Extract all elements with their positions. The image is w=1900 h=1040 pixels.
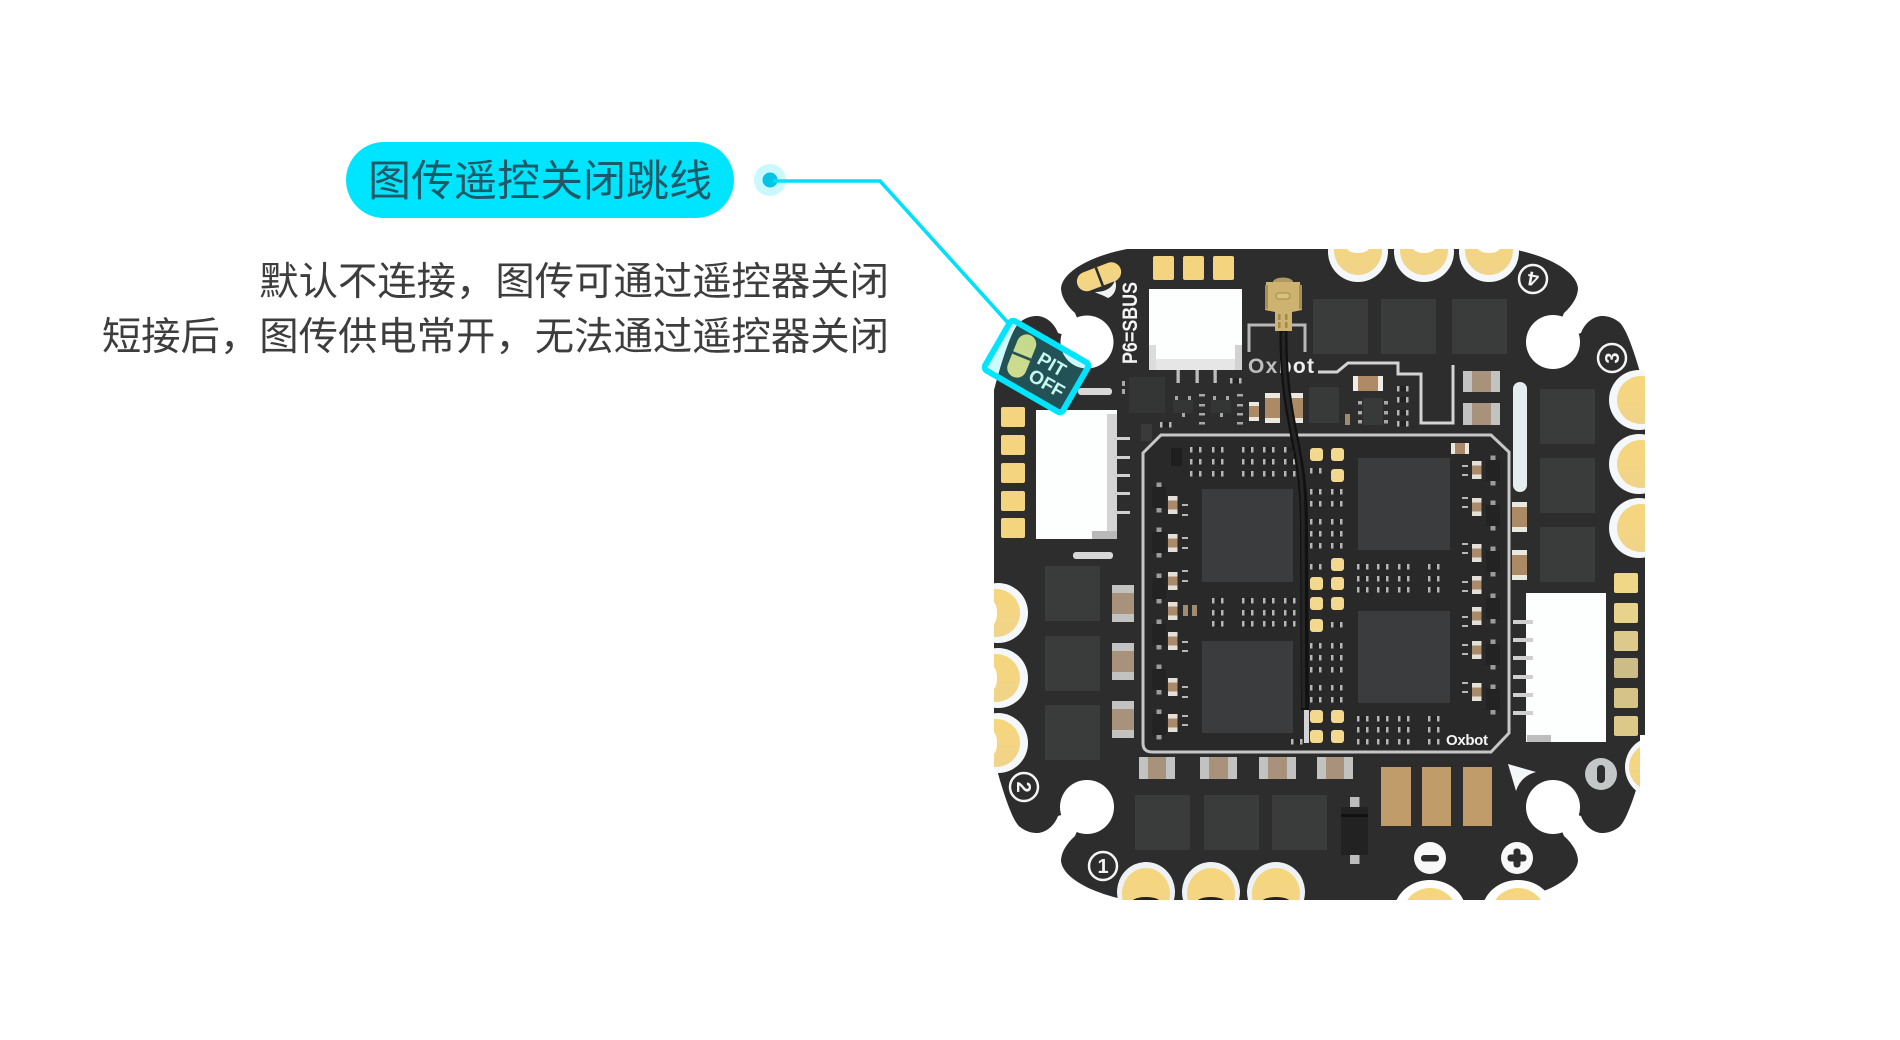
antenna bracket bbox=[1249, 325, 1305, 352]
flight controller board bbox=[994, 249, 1645, 900]
jumper label: OFF bbox=[1025, 366, 1068, 403]
motor label 1: 1 bbox=[1097, 856, 1109, 878]
solder pads rectangular bbox=[1001, 256, 1638, 736]
diode bbox=[1341, 797, 1368, 864]
right connector bbox=[1513, 593, 1606, 742]
shield logo Oxbot: Oxbot bbox=[1446, 732, 1488, 749]
solder pads round bbox=[994, 249, 1645, 900]
power MOSFETs bbox=[1045, 299, 1595, 850]
description text: 默认不连接，图传可通过遥控器关闭 bbox=[259, 260, 889, 304]
motor label 3 bbox=[1598, 344, 1626, 372]
right driver parts bbox=[1451, 443, 1500, 714]
title pill: 图传遥控关闭跳线 bbox=[368, 158, 712, 206]
small top components bbox=[1122, 377, 1408, 441]
left driver parts bbox=[1152, 482, 1197, 740]
motor label 1 bbox=[1089, 852, 1117, 880]
description text bbox=[102, 260, 889, 358]
large chips bbox=[1202, 458, 1450, 733]
minus sign bbox=[1414, 842, 1446, 874]
gold test pads bbox=[1310, 448, 1344, 743]
battery pads bbox=[1381, 767, 1492, 826]
orientation mark bbox=[1095, 280, 1116, 298]
left connector bbox=[1036, 388, 1130, 559]
motor label 4: 4 bbox=[1525, 266, 1541, 290]
motor label 2 bbox=[1010, 773, 1038, 801]
top-left split pad bbox=[1074, 259, 1124, 294]
capacitors bbox=[1112, 371, 1527, 779]
antenna connector bbox=[1265, 278, 1302, 331]
shield module bbox=[1143, 435, 1509, 752]
silk text P6=SBUS: P6=SBUS bbox=[1119, 282, 1142, 364]
arrow marker bbox=[1508, 764, 1536, 791]
jumper label bbox=[1025, 349, 1070, 403]
top connector bbox=[1149, 289, 1242, 383]
antenna cable bbox=[1283, 330, 1309, 743]
jumper label: PIT bbox=[1033, 349, 1070, 382]
title pill bbox=[346, 142, 734, 218]
long white bar bbox=[1513, 382, 1527, 492]
jumper pads bbox=[1004, 332, 1039, 381]
resistor arrays bbox=[1190, 447, 1440, 744]
zero marker bbox=[1585, 758, 1617, 790]
rf trace bbox=[1318, 363, 1453, 423]
description text: 短接后，图传供电常开，无法通过遥控器关闭 bbox=[102, 314, 889, 358]
leader line bbox=[754, 164, 1010, 325]
motor label 3: 3 bbox=[1602, 352, 1624, 364]
plus sign bbox=[1501, 842, 1533, 874]
callout dot bbox=[754, 164, 786, 196]
motor label 2: 2 bbox=[1012, 781, 1034, 793]
motor label 4 bbox=[1519, 265, 1547, 293]
PIT OFF jumper highlight bbox=[983, 319, 1090, 414]
silk logo Oxbot: Oxbot bbox=[1248, 355, 1314, 378]
